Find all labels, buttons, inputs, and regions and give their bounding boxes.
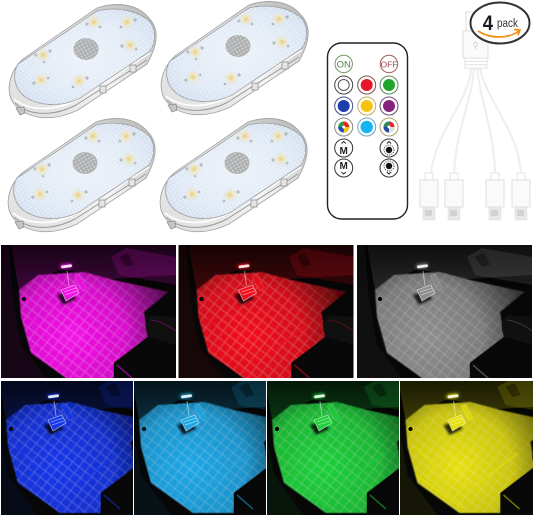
- button: on: [335, 55, 352, 73]
- panel: green footwell light: [267, 381, 399, 515]
- button: off: OFF: [380, 59, 398, 69]
- button: off: [380, 55, 398, 73]
- mode and brightness buttons: M: [340, 161, 348, 172]
- panel: yellow footwell light: [400, 381, 533, 515]
- badge: 4 pack: pack: [497, 18, 518, 30]
- panel: magenta footwell light: [1, 245, 176, 378]
- product: LED light unit bottom right: [160, 119, 307, 232]
- usb splitter cable: [420, 12, 530, 220]
- badge: 4 pack: 4: [483, 12, 493, 35]
- mode and brightness buttons: M: [340, 146, 348, 157]
- product: LED light unit top right: [161, 2, 308, 115]
- badge: 4 pack: [470, 2, 530, 44]
- icon: orange smile arrow: [478, 30, 520, 37]
- remote control: [328, 43, 408, 219]
- colour buttons: [335, 76, 398, 136]
- panel: blue footwell light: [1, 381, 133, 515]
- button: on: ON: [337, 60, 351, 71]
- product: LED light unit top left: [9, 5, 156, 118]
- panel: cyan footwell light: [134, 381, 266, 515]
- panel: white footwell light: [357, 245, 532, 378]
- mode and brightness buttons: [335, 139, 398, 177]
- usb splitter cable: ⚲: [473, 41, 479, 50]
- product: LED light unit bottom left: [8, 119, 155, 232]
- panel: red footwell light: [178, 245, 354, 378]
